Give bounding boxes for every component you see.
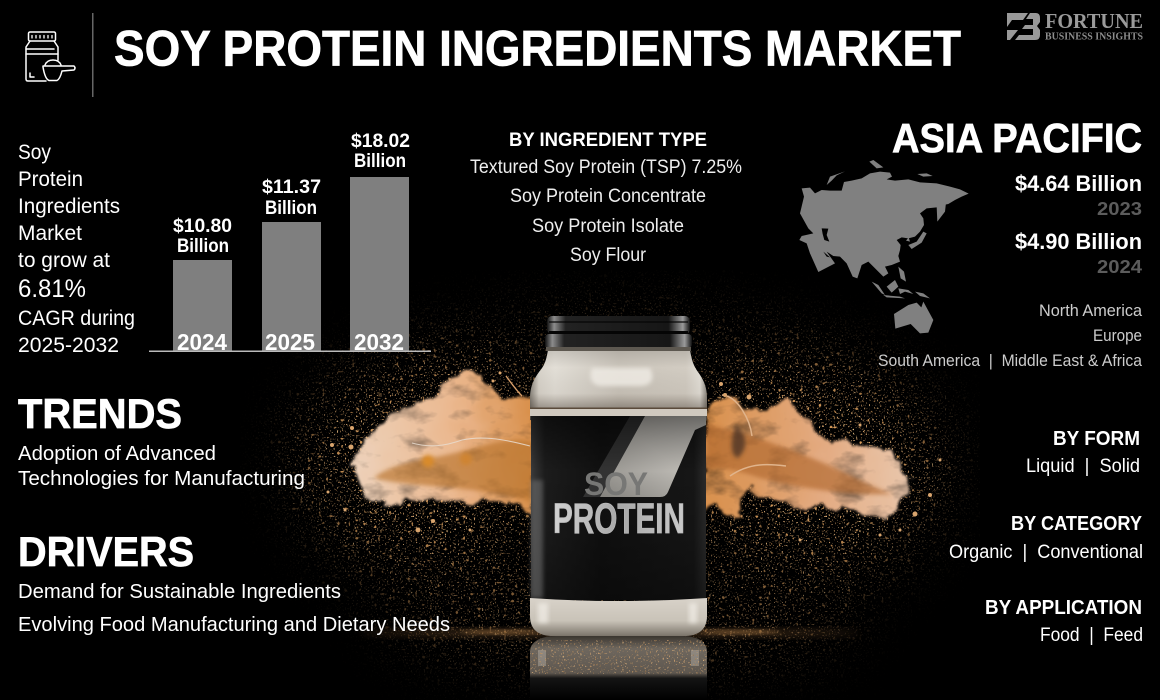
by ingredient type: Textured Soy Protein (TSP) 7.25% — [470, 157, 742, 178]
bar 2024: Billion — [177, 236, 229, 257]
trends — [18, 390, 305, 490]
by application: Food | Feed — [1040, 625, 1143, 646]
bar 2032: Billion — [354, 151, 406, 172]
title: SOY PROTEIN INGREDIENTS MARKET — [114, 20, 961, 76]
trends: Technologies for Manufacturing — [18, 468, 305, 490]
bar 2024 — [173, 216, 232, 355]
bar 2025: $11.37 — [262, 177, 321, 198]
bar 2032: $18.02 — [351, 131, 410, 152]
region heading: Asia Pacific: ASIA PACIFIC — [892, 115, 1142, 161]
region heading: Asia Pacific: $4.90 Billion — [1015, 229, 1142, 254]
region heading: Asia Pacific: $4.64 Billion — [1015, 171, 1142, 196]
jar cap — [545, 316, 692, 351]
logo: Fortune Business Insights: FORTUNE — [1045, 9, 1143, 33]
by ingredient type: Soy Protein Isolate — [532, 216, 684, 237]
market growth text: Ingredients — [18, 195, 120, 218]
bar 2024: $10.80 — [173, 216, 232, 237]
by category: BY CATEGORY — [1011, 513, 1143, 535]
by ingredient type — [470, 130, 742, 266]
powder splash: left — [354, 373, 534, 510]
by category — [949, 513, 1143, 563]
other regions: South America | Middle East & Africa — [878, 352, 1143, 370]
bar 2032 — [350, 131, 410, 355]
bar 2032: 2032 — [354, 329, 404, 355]
trends: TRENDS — [18, 390, 182, 437]
jar label — [531, 416, 706, 600]
market growth text: CAGR during — [18, 307, 135, 330]
by application — [985, 597, 1143, 646]
jar reflection — [530, 636, 707, 700]
market growth text — [18, 141, 135, 357]
product jar — [529, 316, 707, 700]
bar chart — [149, 131, 431, 355]
region heading: Asia Pacific: 2023 — [1097, 199, 1142, 219]
region heading: Asia Pacific — [892, 115, 1142, 277]
market growth text: Soy — [18, 141, 51, 164]
header divider — [92, 13, 94, 97]
drivers: Demand for Sustainable Ingredients — [18, 581, 341, 603]
other regions: North America — [1039, 302, 1143, 320]
bar 2024: 2024 — [177, 329, 227, 355]
trends: Adoption of Advanced — [18, 443, 216, 465]
drivers: Evolving Food Manufacturing and Dietary Needs — [18, 614, 450, 636]
jar base — [530, 598, 707, 636]
market growth text: to grow at — [18, 249, 110, 272]
region heading: Asia Pacific: 2024 — [1097, 257, 1142, 277]
powder droplets — [326, 372, 942, 542]
bar 2025 — [262, 177, 321, 355]
bar 2025: Billion — [265, 198, 317, 219]
by form — [1026, 428, 1140, 477]
header icon: jar and scoop — [26, 32, 75, 81]
market growth text: Market — [18, 222, 82, 245]
powder splash: right — [702, 395, 910, 518]
market growth text: 6.81% — [18, 275, 86, 303]
by application: BY APPLICATION — [985, 597, 1142, 619]
jar body shoulder — [530, 350, 707, 420]
by ingredient type: Soy Flour — [570, 245, 647, 266]
by ingredient type: Soy Protein Concentrate — [510, 186, 706, 207]
logo: Fortune Business Insights: BUSINESS INSIGHTS — [1045, 32, 1143, 42]
other regions — [878, 302, 1143, 370]
label text: SOY: SOY — [584, 466, 648, 502]
bar 2025: 2025 — [265, 329, 315, 355]
logo: Fortune Business Insights — [1007, 9, 1143, 42]
powder particles — [240, 270, 980, 700]
other regions: Europe — [1093, 327, 1142, 345]
drivers — [18, 528, 450, 636]
by form: BY FORM — [1053, 428, 1140, 450]
market growth text: 2025-2032 — [18, 334, 119, 357]
drivers: DRIVERS — [18, 528, 194, 575]
by ingredient type: BY INGREDIENT TYPE — [509, 130, 707, 151]
by form: Liquid | Solid — [1026, 456, 1140, 477]
floor powder — [360, 630, 860, 636]
map: Asia Pacific — [799, 160, 969, 333]
label slash graphic — [583, 416, 706, 497]
market growth text: Protein — [18, 168, 83, 191]
by category: Organic | Conventional — [949, 542, 1143, 563]
label text: PROTEIN: PROTEIN — [553, 495, 685, 543]
